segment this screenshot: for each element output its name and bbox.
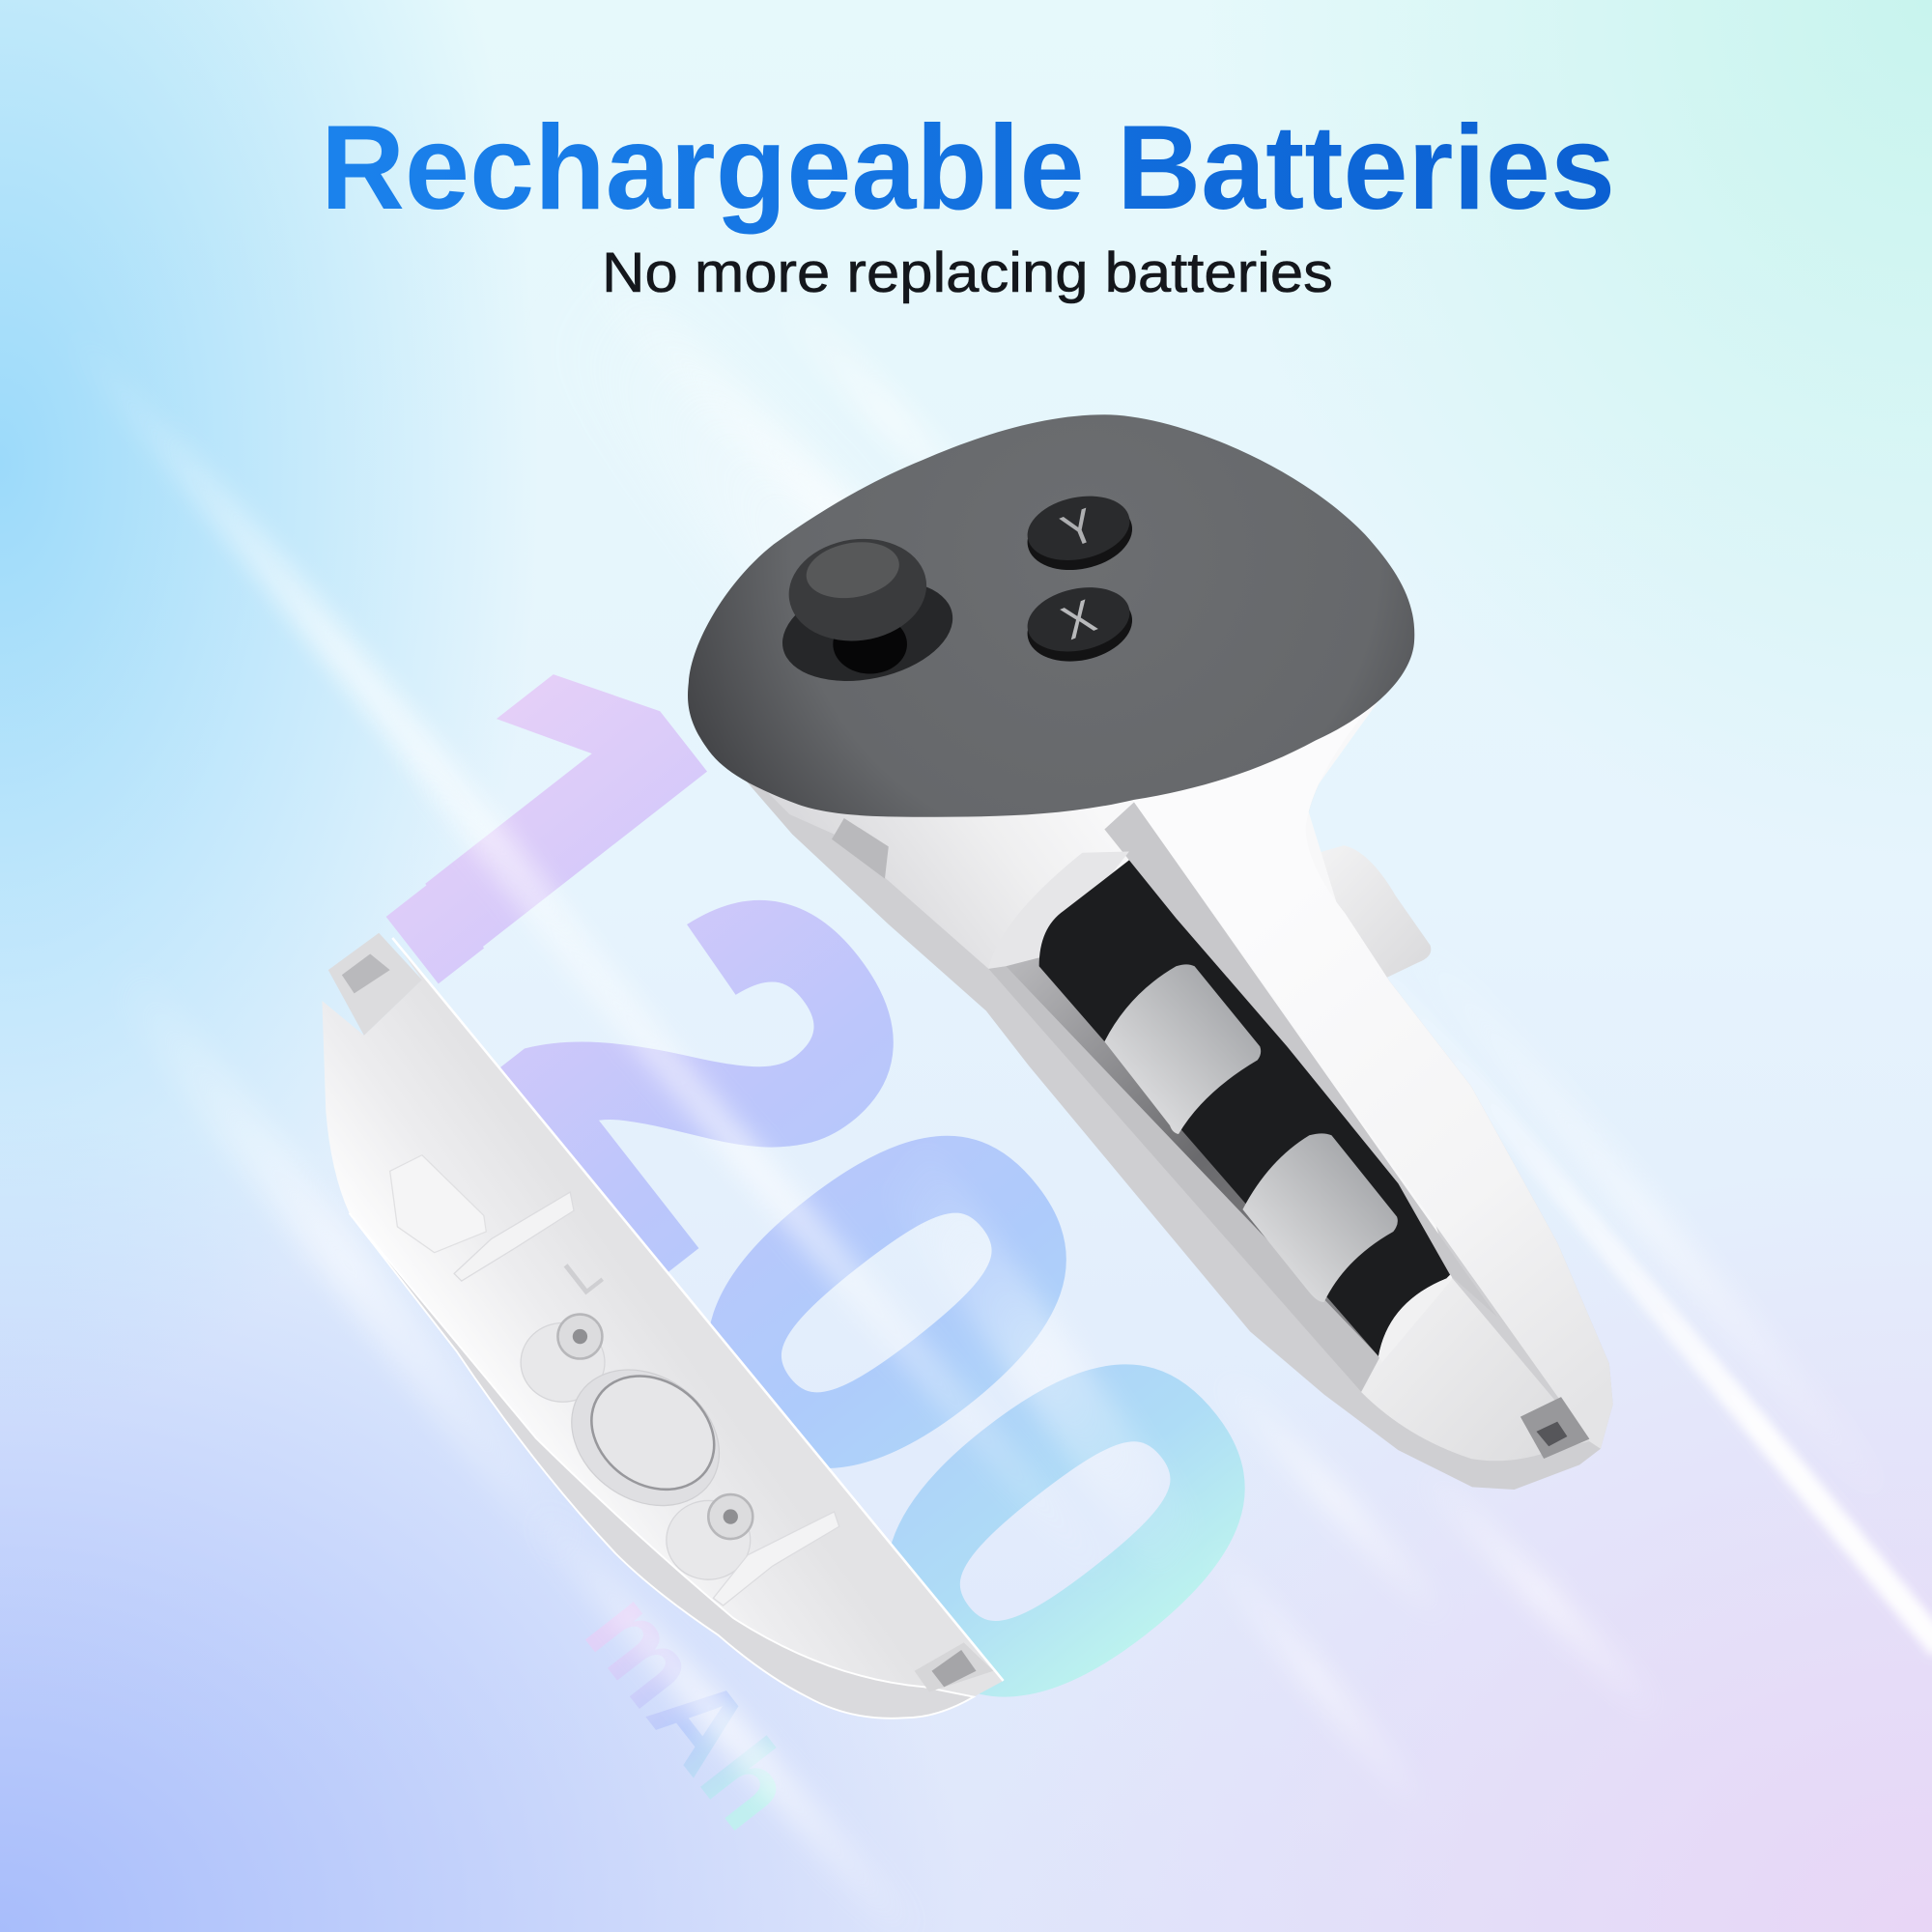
trigger button bbox=[1306, 845, 1431, 979]
battery contact 1 bbox=[1104, 964, 1261, 1134]
cavity wall bbox=[988, 966, 1379, 1392]
contact pin 1 bbox=[521, 1315, 605, 1402]
letter L: L bbox=[554, 1243, 612, 1307]
battery cavity bbox=[988, 802, 1497, 1392]
hinge notch bbox=[832, 818, 889, 879]
hood end face bbox=[988, 851, 1129, 969]
top cap bbox=[688, 414, 1414, 817]
cavity floor bbox=[1006, 957, 1381, 1357]
battery door bbox=[322, 933, 1004, 1719]
X button: X bbox=[1055, 590, 1103, 650]
digit 1: 1 bbox=[209, 549, 846, 1136]
unit mAh: mAh bbox=[560, 1569, 821, 1852]
X button bbox=[1021, 579, 1139, 670]
watermark: 1200 mAh bbox=[386, 674, 1245, 1831]
contact pin 2 bbox=[667, 1494, 753, 1579]
thumbstick bbox=[773, 530, 962, 696]
black battery bbox=[1039, 860, 1450, 1356]
Y button bbox=[1021, 487, 1139, 580]
fin 1 bbox=[454, 1192, 574, 1281]
title: Rechargeable Batteries bbox=[321, 101, 1615, 235]
top edge highlight bbox=[392, 938, 1004, 1681]
battery end bbox=[1378, 1278, 1453, 1362]
subtitle: No more replacing batteries bbox=[602, 242, 1333, 304]
lower end of the body bbox=[1361, 1278, 1589, 1461]
door shell bbox=[322, 938, 1004, 1719]
fin 2 bbox=[713, 1512, 839, 1605]
top tab bbox=[328, 933, 422, 1036]
cavity upper wall bbox=[1104, 802, 1497, 1317]
contact pad bbox=[546, 1342, 746, 1534]
top white strip bbox=[1111, 679, 1613, 1449]
Y button: Y bbox=[1055, 498, 1103, 558]
controller silhouette with outer band bbox=[740, 679, 1613, 1490]
hook bbox=[390, 1155, 486, 1253]
body surface bbox=[740, 679, 1454, 1392]
digit 1 stem extension bbox=[386, 881, 484, 983]
digits 200: 200 bbox=[389, 781, 1384, 1826]
controller bbox=[322, 414, 1613, 1719]
outer band bbox=[350, 1213, 974, 1719]
latch slot bbox=[1520, 1397, 1589, 1459]
battery contact 2 bbox=[1242, 1133, 1398, 1302]
bottom tab bbox=[915, 1642, 993, 1691]
